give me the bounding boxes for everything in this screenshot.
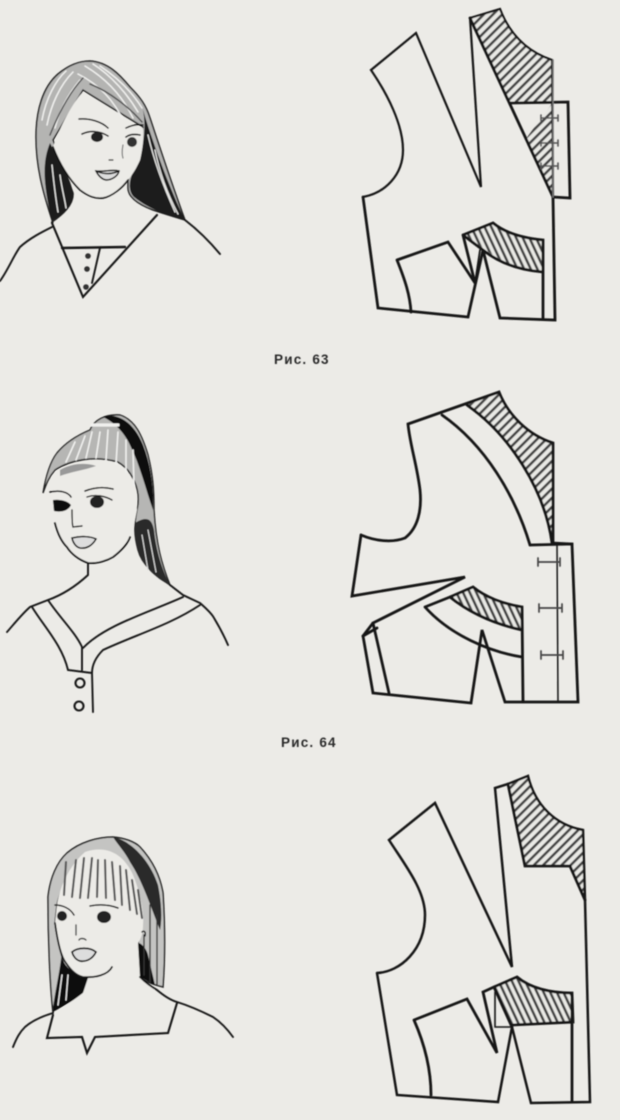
caption Рис. 63: Рис. 63 — [274, 352, 330, 367]
sewing pattern for third figure — [377, 776, 590, 1103]
hatched yoke, third figure — [508, 776, 585, 900]
portrait: woman with fringe and notched neckline — [13, 837, 233, 1053]
hatched lower yoke, figure 63 — [463, 223, 543, 272]
hatched lower yoke, figure 64 — [450, 587, 522, 630]
sewing pattern for figure 64 — [352, 392, 578, 703]
portrait: woman with long hair and V collar — [0, 61, 220, 297]
portrait: woman with ponytail and double collar — [7, 415, 228, 712]
fastenings, figure 64 — [538, 558, 563, 659]
hatched lower yoke, third figure — [494, 977, 573, 1025]
fastenings, figure 63 — [541, 115, 558, 169]
hatched yoke, figure 63 — [470, 9, 553, 103]
caption Рис. 64: Рис. 64 — [281, 735, 337, 750]
hatched yoke, figure 64 — [467, 392, 553, 543]
sewing pattern for figure 63 — [363, 9, 570, 320]
